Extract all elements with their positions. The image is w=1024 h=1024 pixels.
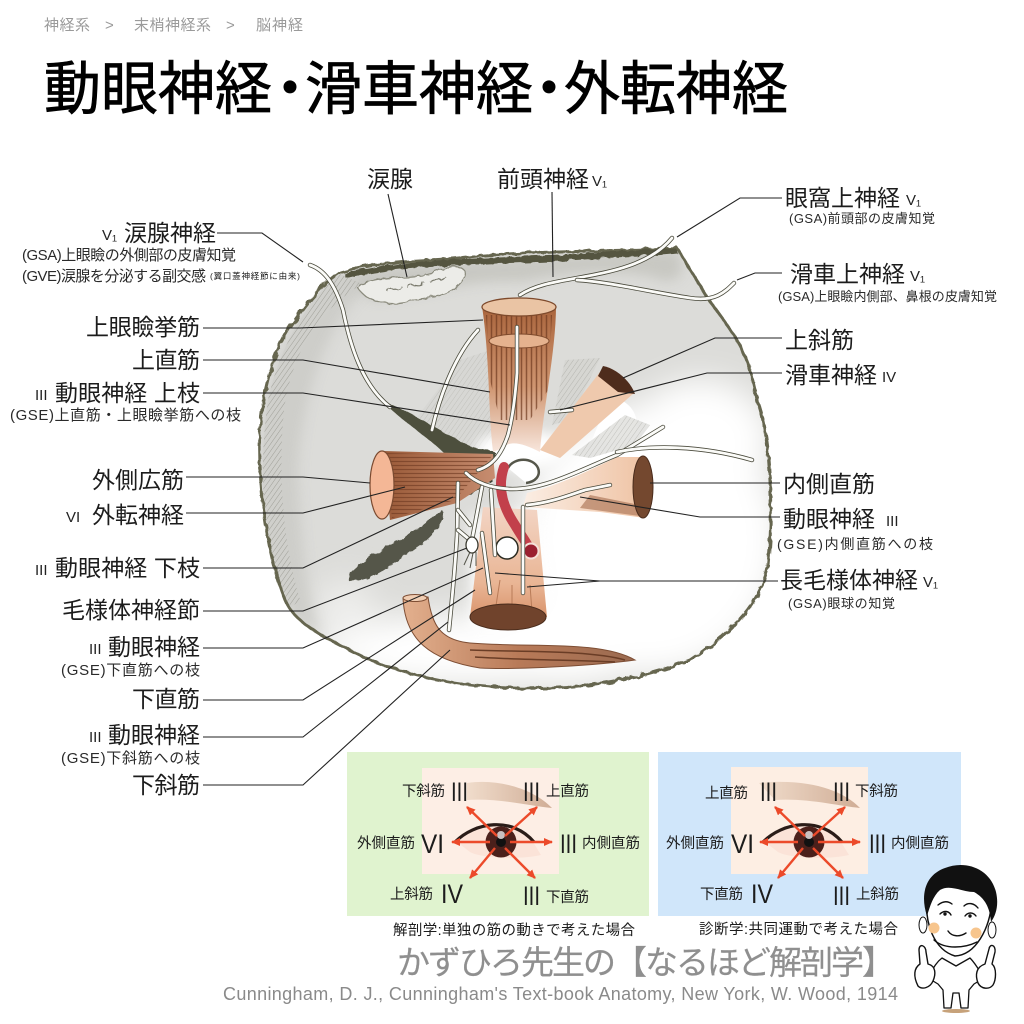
eye	[455, 824, 541, 858]
label: 動眼神経 下直筋への枝	[61, 634, 200, 679]
muscle labels: 上直筋	[705, 785, 748, 802]
muscle labels	[666, 777, 949, 911]
label: 前頭神経 V1: V₁	[592, 173, 607, 190]
muscle labels: 下直筋	[700, 886, 743, 903]
panel: diagnostic eye diagram	[658, 752, 961, 916]
ears	[919, 917, 996, 938]
label: 滑車神経: IV	[882, 369, 896, 386]
breadcrumb: >	[226, 17, 235, 34]
label: 動眼神経 下斜筋への枝: III	[89, 729, 102, 746]
inferior rectus muscle	[470, 507, 547, 630]
hair	[924, 865, 997, 922]
body	[928, 958, 984, 1008]
illustration: orbit with extraocular muscles and nerves	[260, 238, 780, 688]
muscle labels: III	[523, 881, 540, 911]
ophthalmic artery and optic nerve	[496, 460, 539, 559]
label: 眼窩上神経: 眼窩上神経	[785, 185, 900, 211]
muscle labels: 上斜筋	[856, 886, 899, 903]
label: 動眼神経 内側直筋への枝	[777, 506, 933, 552]
inferior oblique muscle	[403, 594, 635, 668]
label: 上眼瞼挙筋: 上眼瞼挙筋	[86, 314, 200, 340]
label: 動眼神経 上枝: 動眼神経 上枝	[55, 380, 200, 406]
muscle labels: 外側直筋	[666, 835, 724, 852]
medial rectus muscle	[523, 456, 653, 518]
label: 涙腺神経: (GVE)涙腺を分泌する副交感	[22, 268, 206, 285]
muscle labels: IV	[751, 879, 773, 909]
label: 毛様体神経節: 毛様体神経節	[62, 597, 200, 623]
muscle labels: VI	[421, 829, 444, 859]
lateral rectus muscle	[370, 451, 495, 520]
lacrimal gland	[358, 267, 465, 304]
label: 滑車上神経: (GSA)上眼瞼内側部、鼻根の皮膚知覚	[778, 289, 997, 304]
label: 前頭神経 V1: 前頭神経	[497, 166, 589, 192]
muscle labels: III	[833, 777, 850, 807]
label: 長毛様体神経	[780, 567, 938, 611]
caption: diagnosis: 診断学:共同運動で考えた場合	[699, 921, 898, 938]
breadcrumb: 末梢神経系	[134, 17, 211, 34]
muscle labels: III	[560, 829, 577, 859]
caption: anatomy: 解剖学:単独の筋の動きで考えた場合	[393, 922, 636, 939]
label: 外転神経: 外転神経	[92, 502, 184, 528]
label: 滑車上神経: V₁	[910, 268, 925, 285]
muscle labels: 外側直筋	[357, 835, 415, 852]
label: 下直筋: 下直筋	[132, 686, 200, 712]
eyebrow	[467, 782, 552, 808]
label: 動眼神経 上枝: (GSE)上直筋・上眼瞼挙筋への枝	[10, 407, 241, 424]
superior rectus and levator muscle	[482, 298, 556, 452]
muscle labels: III	[451, 777, 468, 807]
leader lines	[186, 192, 782, 785]
label: 動眼神経 下枝: III	[35, 562, 48, 579]
label: 動眼神経 下直筋への枝: III	[89, 641, 102, 658]
eye	[763, 824, 849, 858]
label: 動眼神経 下斜筋への枝: 動眼神経	[108, 722, 200, 748]
muscle labels: III	[523, 777, 540, 807]
movement arrows	[452, 807, 552, 878]
muscle labels: VI	[731, 829, 754, 859]
label: 外側広筋: 外側広筋	[92, 467, 184, 493]
label: 動眼神経 下斜筋への枝: (GSE)下斜筋への枝	[61, 750, 200, 767]
icon: cartoon doctor giving thumbs up	[915, 865, 997, 1013]
title	[44, 57, 788, 122]
cheeks	[928, 922, 982, 938]
muscle labels	[357, 777, 640, 911]
label: 長毛様体神経: 長毛様体神経	[780, 567, 918, 593]
label: 動眼神経 内側直筋への枝: 動眼神経	[783, 506, 875, 532]
label: 涙腺: 涙腺	[367, 166, 413, 192]
label: 内側直筋: 内側直筋	[783, 471, 875, 497]
label: 涙腺神経: (翼口蓋神経節に由来)	[210, 271, 300, 281]
title: 動眼神経	[44, 57, 272, 122]
label: 涙腺神経: V₁	[102, 227, 117, 244]
label: 動眼神経 内側直筋への枝: (GSE)内側直筋への枝	[777, 536, 933, 552]
label: 滑車上神経: 滑車上神経	[790, 261, 905, 287]
muscle labels: 内側直筋	[891, 835, 949, 852]
muscle labels: 下斜筋	[402, 783, 445, 800]
muscle labels: 上直筋	[546, 783, 589, 800]
label: 長毛様体神経: (GSA)眼球の知覚	[788, 596, 895, 611]
label: 滑車神経: 滑車神経	[785, 362, 877, 388]
muscle labels: 内側直筋	[582, 835, 640, 852]
breadcrumb: 神経系	[44, 17, 90, 34]
breadcrumb: 脳神経	[256, 17, 303, 34]
label: 長毛様体神経: V₁	[923, 574, 938, 591]
label: 涙腺神経	[22, 220, 300, 285]
muscle labels: III	[833, 881, 850, 911]
breadcrumb: >	[105, 17, 114, 34]
nerves	[310, 238, 752, 630]
label: 滑車上神経	[778, 261, 997, 304]
title: 外転神経	[564, 57, 788, 122]
muscle labels: III	[869, 829, 886, 859]
label: 動眼神経 下直筋への枝: (GSE)下直筋への枝	[61, 662, 200, 679]
title: ・	[520, 57, 578, 122]
eyebrow	[759, 782, 860, 808]
title: 滑車神経	[305, 57, 533, 122]
muscle labels: 下斜筋	[855, 783, 898, 800]
muscle labels: 上斜筋	[390, 886, 433, 903]
label: 眼窩上神経	[785, 185, 935, 226]
orbit background	[260, 248, 780, 688]
movement arrows	[760, 807, 860, 878]
label: 眼窩上神経: V₁	[906, 192, 921, 209]
label: 動眼神経 下枝: 動眼神経 下枝	[55, 555, 200, 581]
label: 上斜筋: 上斜筋	[785, 327, 854, 353]
label: 下斜筋: 下斜筋	[132, 772, 200, 798]
label: 動眼神経 上枝: III	[35, 387, 48, 404]
hands	[915, 946, 935, 988]
panel: anatomy eye diagram	[347, 752, 649, 916]
label: 涙腺神経: 涙腺神経	[124, 220, 216, 246]
muscle labels: III	[760, 777, 777, 807]
label: 外転神経: VI	[66, 509, 80, 526]
brand name: かずひろ先生の【なるほど解剖学】	[397, 944, 895, 981]
face	[927, 882, 992, 956]
label: 動眼神経 下直筋への枝: 動眼神経	[108, 634, 200, 660]
title: ・	[261, 57, 319, 122]
superior oblique muscle	[540, 366, 635, 458]
muscle labels: IV	[441, 879, 463, 909]
label: 涙腺神経: (GSA)上眼瞼の外側部の皮膚知覚	[22, 247, 236, 264]
source citation: Cunningham, D. J., Cunningham's Text-book Anatomy, New York, W. Wood, 1914	[223, 984, 898, 1004]
dark orbital shadows	[348, 402, 495, 581]
label: 上直筋: 上直筋	[132, 347, 200, 373]
breadcrumb	[44, 17, 303, 34]
label: 動眼神経 下斜筋への枝	[61, 722, 200, 767]
label: 眼窩上神経: (GSA)前頭部の皮膚知覚	[789, 211, 935, 226]
muscle labels: 下直筋	[546, 889, 589, 906]
label: 動眼神経 内側直筋への枝: III	[886, 513, 899, 530]
label: 動眼神経 上枝	[10, 380, 241, 424]
facial features	[934, 902, 978, 947]
